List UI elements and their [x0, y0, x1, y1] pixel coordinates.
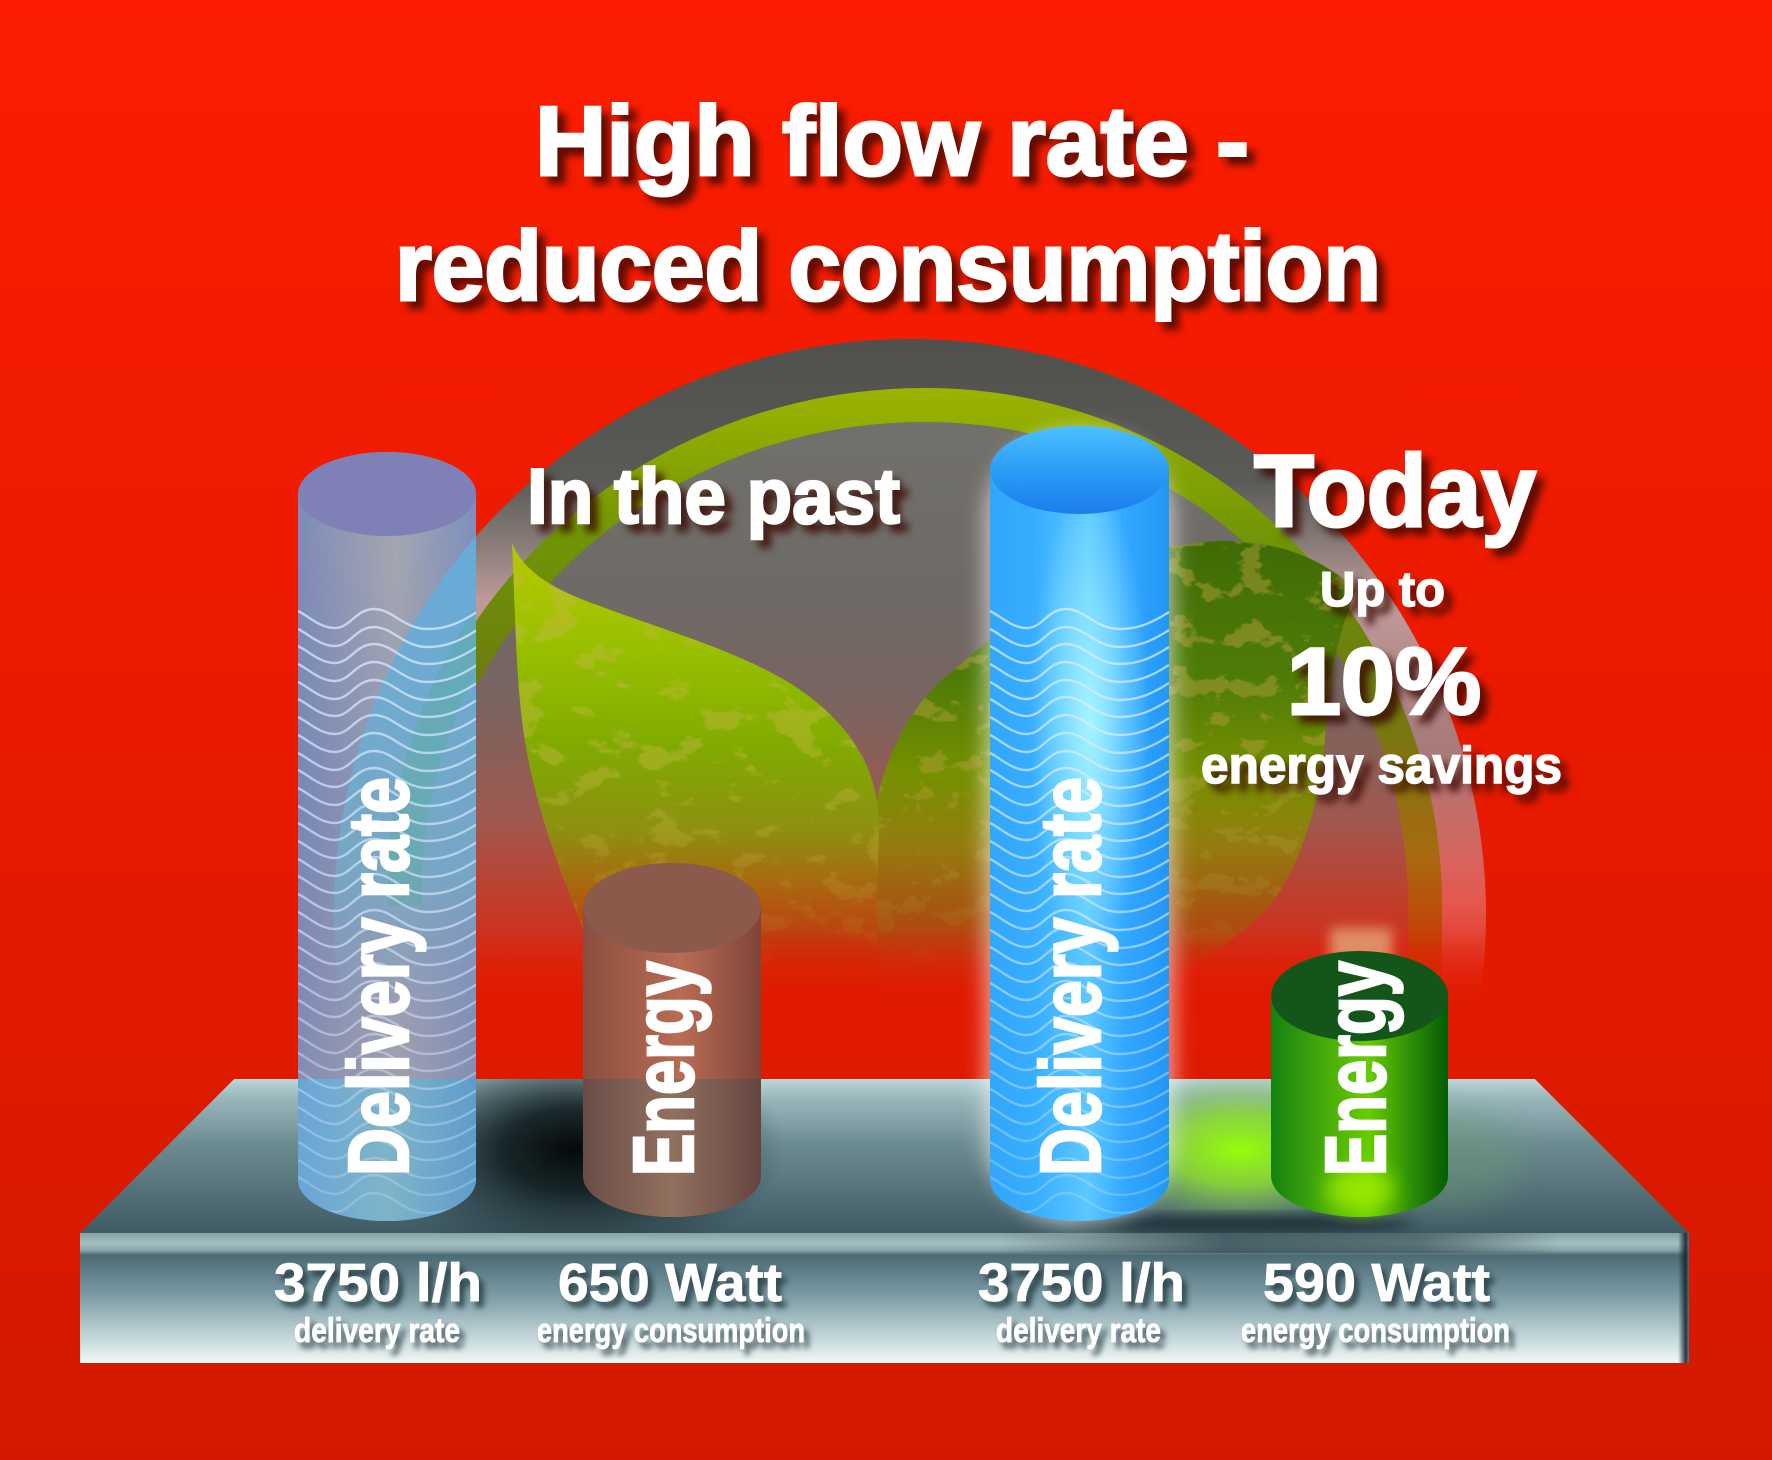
label: Energy today: Energy: [1309, 961, 1404, 1176]
value: 590 Watt: energy consumption: [1241, 1312, 1510, 1350]
title: High flow rate -: [535, 86, 1249, 196]
column: energy in the past: [583, 863, 761, 1217]
callout: today savings: [1201, 434, 1562, 795]
column: energy today: [1271, 951, 1448, 1217]
value: 590 Watt: [1241, 1253, 1510, 1350]
label: Delivery rate past: Delivery rate: [332, 777, 427, 1176]
outer circle: [476, 339, 1486, 980]
top ellipse: [298, 452, 476, 536]
top ellipse: [583, 863, 761, 953]
label: Delivery rate today: Delivery rate: [1024, 777, 1119, 1176]
column: delivery rate today: [990, 426, 1169, 1221]
wave lines: [990, 609, 1169, 1213]
inner disc: [476, 422, 1408, 966]
platform: [80, 1079, 1689, 1363]
heading: in the past: In the past: [527, 452, 900, 540]
column glow: [984, 430, 1175, 1225]
green arc: [405, 405, 1425, 1010]
value: 650 Watt: 650 Watt: [558, 1253, 782, 1313]
value: 3750 l/h past: delivery rate: [294, 1312, 460, 1350]
value: 3750 l/h past: [274, 1253, 482, 1350]
value: 3750 l/h today: 3750 l/h: [978, 1253, 1185, 1313]
platform top surface: [80, 1079, 1689, 1233]
callout: today savings: Today: [1254, 434, 1536, 548]
top ellipse: [1271, 951, 1448, 1041]
value: 650 Watt: [537, 1253, 805, 1350]
top ellipse: [990, 426, 1169, 514]
callout: today savings: Up to: [1320, 563, 1445, 617]
callout: today savings: energy savings: [1201, 737, 1562, 795]
glow above green cylinder: [1330, 928, 1392, 964]
left light leaf: [512, 543, 879, 959]
value: 590 Watt: 590 Watt: [1263, 1253, 1490, 1313]
wave lines: [298, 609, 477, 1213]
label: Energy past: Energy: [617, 961, 712, 1176]
title: reduced consumption: [395, 211, 1381, 321]
value: 3750 l/h past: 3750 l/h: [274, 1253, 482, 1313]
callout: today savings: 10%: [1287, 629, 1481, 735]
emblem: circle with arc and leaves: [476, 339, 1486, 980]
right dark leaf: [876, 541, 1356, 968]
title: [395, 86, 1381, 321]
platform front face: [80, 1233, 1689, 1363]
column: delivery rate in the past: [298, 452, 476, 1221]
value: 3750 l/h today: delivery rate: [996, 1312, 1161, 1350]
value: 650 Watt: energy consumption: [537, 1312, 805, 1350]
value: 3750 l/h today: [978, 1253, 1185, 1350]
